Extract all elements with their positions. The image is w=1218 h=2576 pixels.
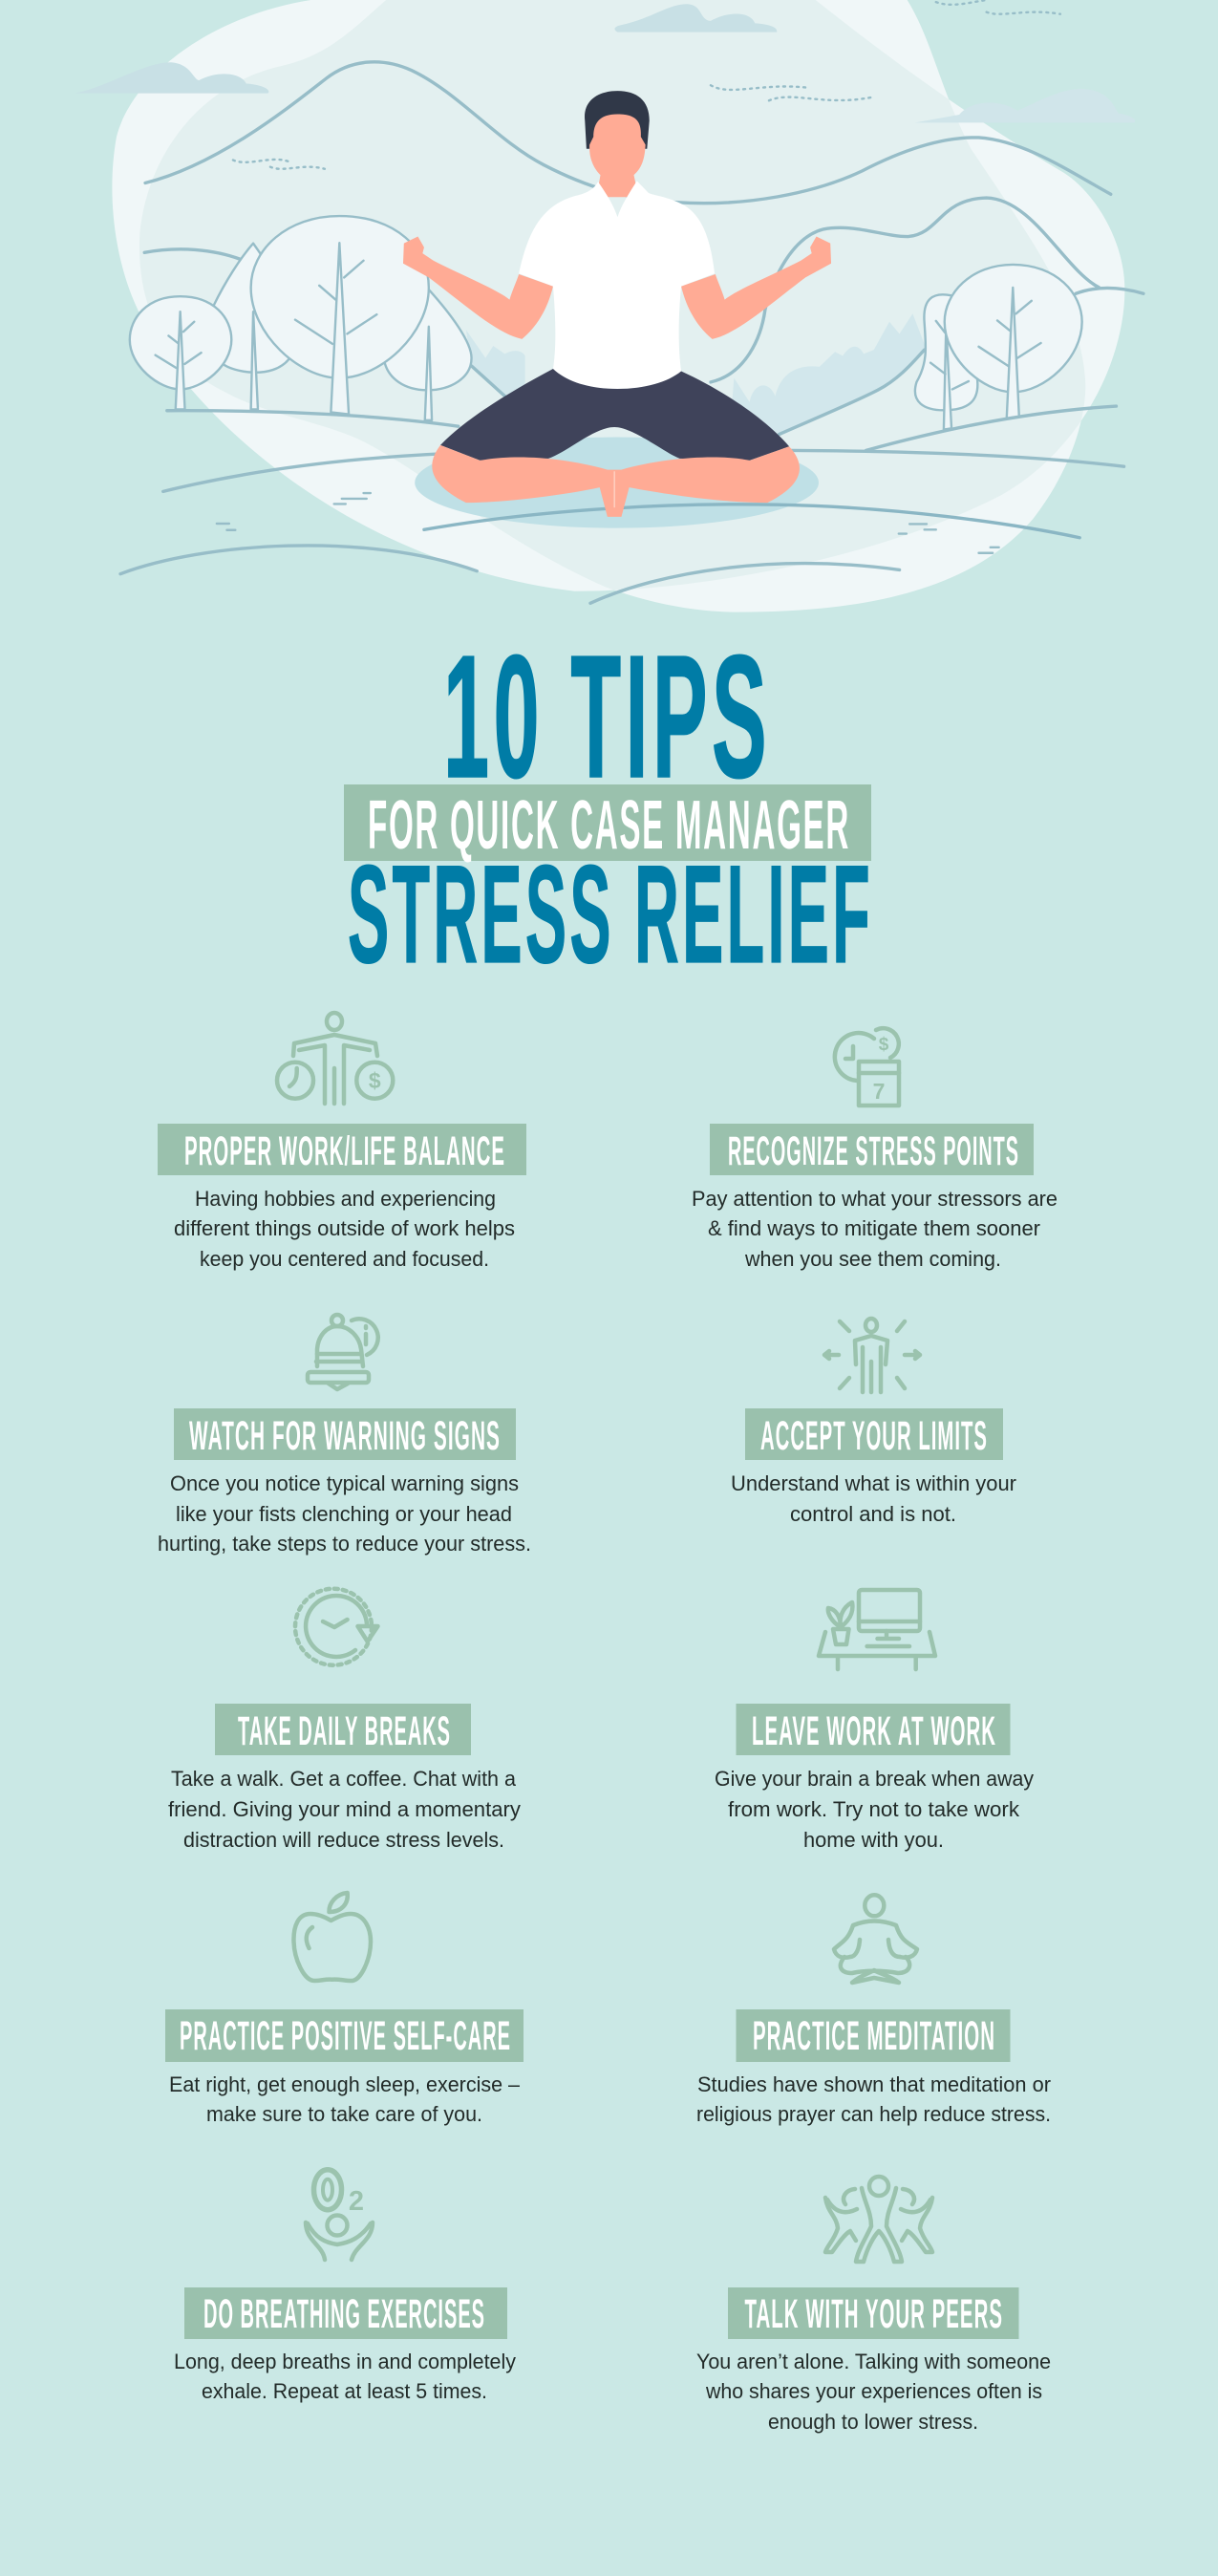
description: hurting, take steps to reduce your stress. [158,1532,531,1556]
hero illustration: man meditating in landscape [75,0,1143,612]
icon: clock with circular arrow [295,1589,378,1665]
icon: person balancing clock and dollar [277,1013,393,1104]
icon: apple [293,1893,371,1981]
icon: three people with raised arms [825,2177,932,2262]
icon: person with arrows pointing outward [824,1319,920,1392]
icon: person breathing oxygen [306,2170,373,2260]
description [696,2072,1051,2126]
description: like your fists clenching or your head [176,1502,512,1526]
dotted squiggles [233,0,1060,169]
background blobs [112,0,1124,612]
description [168,1767,522,1852]
description: Understand what is within your [731,1471,1016,1495]
title block: 10 TIPS [443,618,771,814]
description: make sure to take care of you. [206,2102,482,2126]
heading: leave work at work [736,1704,1011,1755]
icon: clock, coin and calendar [835,1028,899,1106]
heading: proper work/life balance: PROPER WORK/LIFE BALANCE [184,1128,505,1174]
description [692,1187,1058,1271]
heading: proper work/life balance [158,1124,526,1175]
tip: leave work at work [715,1590,1035,1852]
shirt [519,181,715,389]
tip: do breathing exercises [174,2170,517,2403]
description: Studies have shown that meditation or [697,2072,1051,2096]
description: Pay attention to what your stressors are [692,1187,1058,1211]
description [158,1471,531,1556]
description: exhale. Repeat at least 5 times. [202,2379,487,2403]
heading: do breathing exercises: DO BREATHING EXERCISES [203,2291,485,2337]
heading: practice meditation [736,2009,1011,2062]
description: Take a walk. Get a coffee. Chat with a [171,1767,516,1791]
description: enough to lower stress. [768,2410,978,2434]
icon: person balancing clock and dollar: $ [369,1068,381,1093]
foreground lines [120,493,1079,603]
tip: accept your limits [731,1319,1016,1526]
description: Give your brain a break when away [715,1767,1035,1791]
icon: clock, coin and calendar: 7 [873,1079,885,1104]
landscape lines [144,62,1143,491]
icon: bell with info bubble [308,1315,378,1389]
tip: take daily breaks [168,1589,522,1852]
description: keep you centered and focused. [200,1247,489,1271]
description [174,2350,517,2403]
left arm [403,236,553,339]
heading: take daily breaks: TAKE DAILY BREAKS [238,1708,451,1754]
tip: recognize stress points [692,1028,1058,1271]
heading: do breathing exercises [184,2287,507,2339]
description: You aren’t alone. Talking with someone [696,2350,1051,2373]
crossed legs [432,445,800,517]
description: when you see them coming. [744,1247,1001,1271]
description [169,2072,520,2126]
heading: watch for warning signs: WATCH FOR WARNING SIGNS [189,1413,501,1459]
description [715,1767,1035,1852]
subtitle banner [344,784,871,864]
description: distraction will reduce stress levels. [183,1828,504,1852]
icon: person breathing oxygen: 2 [349,2186,364,2217]
description [731,1471,1016,1526]
description [696,2350,1051,2434]
shorts [440,369,789,461]
right arm [681,236,831,339]
head and neck [589,115,646,197]
hair [585,91,650,149]
tip: talk with your peers [696,2177,1051,2434]
tip: proper work/life balance [158,1013,526,1271]
description: Long, deep breaths in and completely [174,2350,517,2373]
description: & find ways to mitigate them sooner [708,1216,1040,1240]
title block [344,618,873,992]
tip: practice meditation [696,1895,1051,2126]
icon: clock, coin and calendar: $ [879,1035,889,1055]
description [174,1187,515,1271]
description: Having hobbies and experiencing [195,1187,496,1211]
description: religious prayer can help reduce stress. [696,2102,1051,2126]
right tree group [915,265,1082,430]
description: Once you notice typical warning signs [170,1471,519,1495]
description: control and is not. [790,1502,956,1526]
icon: seated meditating person [834,1895,917,1983]
description: who shares your experiences often is [705,2379,1042,2403]
tip: practice positive self-care [165,1893,524,2126]
description: friend. Giving your mind a momentary [168,1797,522,1821]
left tree group [130,216,472,420]
description: from work. Try not to take work [728,1797,1020,1821]
heading: practice positive self-care [165,2009,524,2062]
infographic page: PRACTICE POSITIVE SELF-CARE [180,2013,511,2059]
heading: talk with your peers [728,2287,1018,2339]
icon: computer and plant on desk [819,1590,935,1669]
man figure [403,91,831,517]
mat under the man [415,438,819,528]
description: home with you. [803,1828,944,1852]
heading: recognize stress points [710,1124,1034,1175]
clouds [75,4,1135,122]
heading: accept your limits [745,1408,1003,1460]
description: different things outside of work helps [174,1216,515,1240]
pale bushes [466,313,926,435]
description: Eat right, get enough sleep, exercise – [169,2072,520,2096]
tip: watch for warning signs [158,1315,531,1556]
heading: take daily breaks [215,1704,471,1755]
heading: watch for warning signs [174,1408,516,1460]
